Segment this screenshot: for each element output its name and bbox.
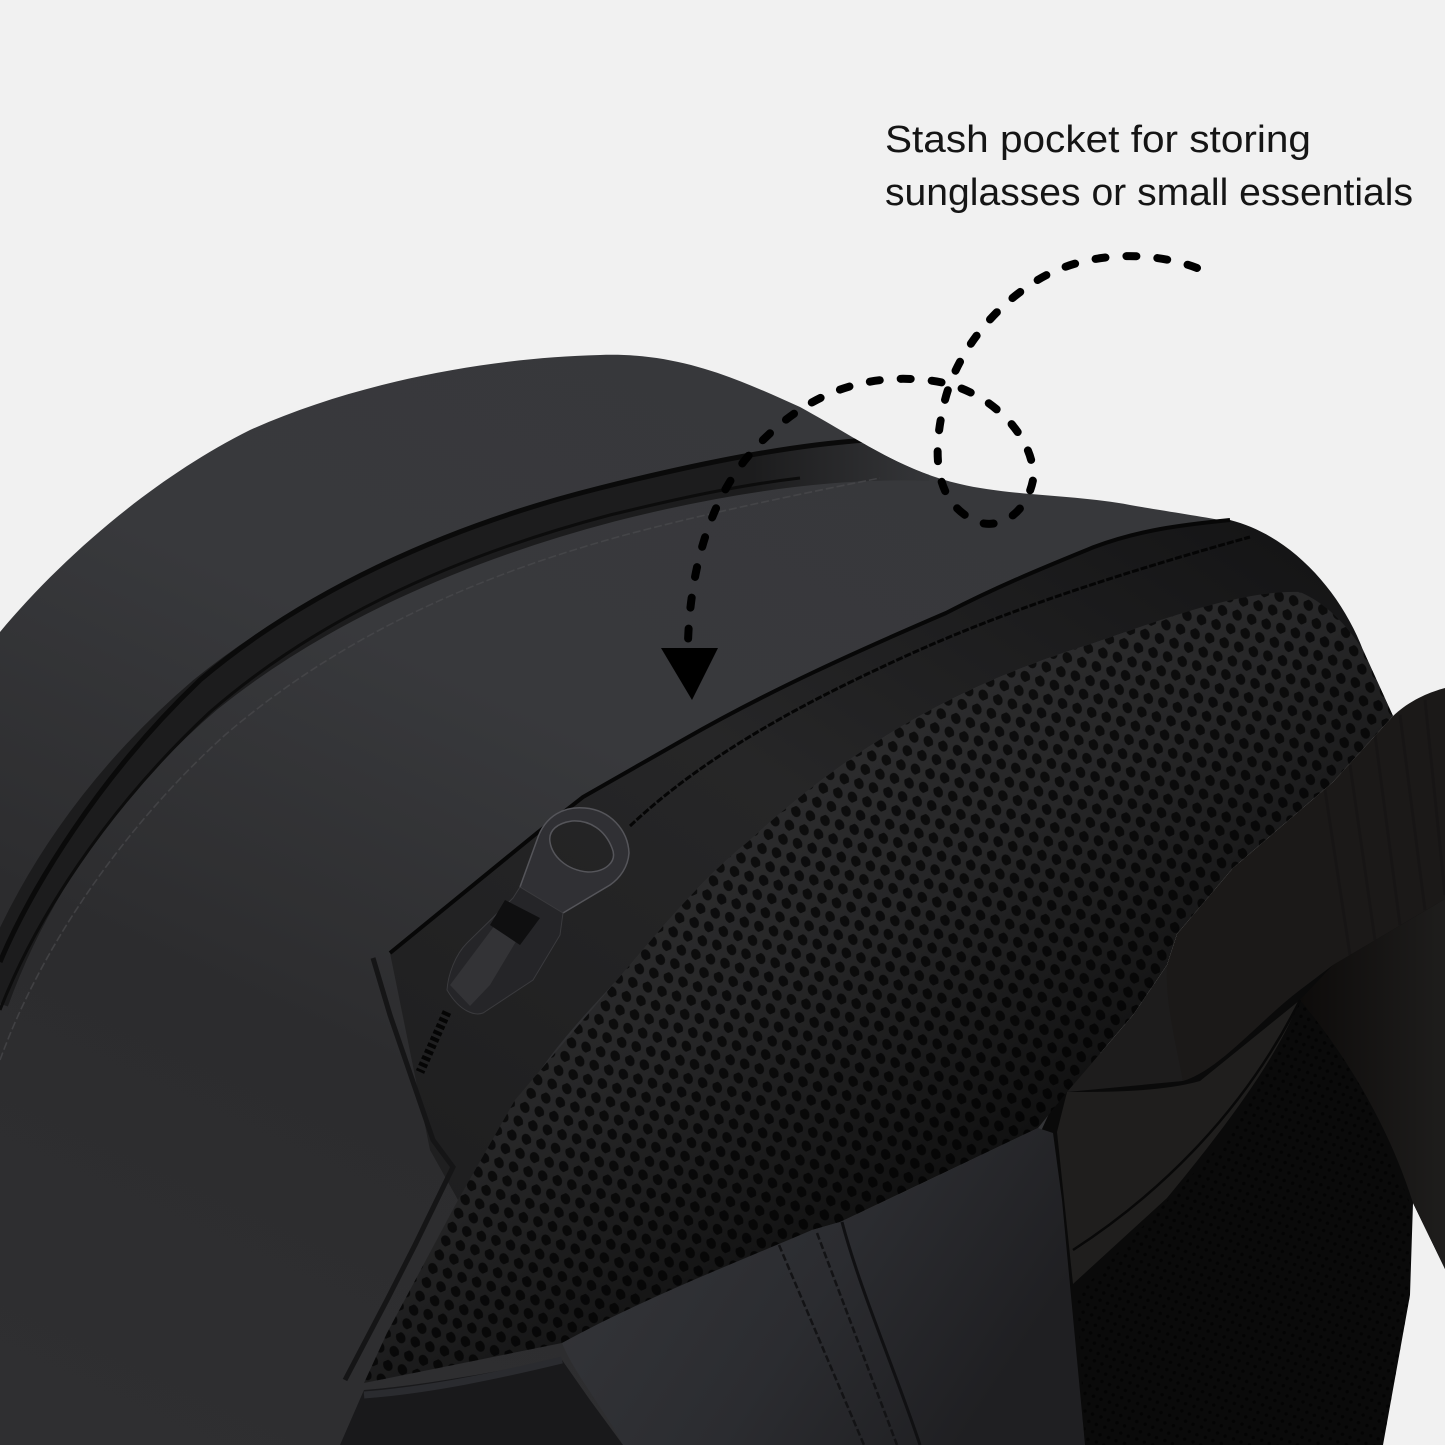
flap edge xyxy=(345,958,453,1380)
bag main leather body xyxy=(0,355,1290,1445)
upper zipper seam xyxy=(0,440,930,1060)
front carry handle xyxy=(562,1128,1085,1445)
zipper teeth xyxy=(420,1012,447,1072)
lower back mesh and shoulder strap base xyxy=(800,880,1445,1445)
slider window xyxy=(490,900,540,945)
zipper pull tab xyxy=(520,808,629,913)
mesh holes xyxy=(364,592,1393,1383)
arrow: dashed looping pointer to pocket xyxy=(661,256,1197,700)
arrow head xyxy=(661,648,718,700)
binding edge line xyxy=(1073,1000,1300,1250)
glossy side binding xyxy=(1057,1000,1300,1284)
zipper binding band xyxy=(390,520,1393,1200)
annotation text: sunglasses or small essentials xyxy=(885,172,1413,214)
right shoulder strap body xyxy=(1300,899,1445,1269)
woven strap webbing base xyxy=(1067,965,1183,1092)
lower piping xyxy=(364,1360,562,1395)
lower mesh texture xyxy=(1077,1000,1410,1445)
slider bridge xyxy=(450,905,530,1006)
handle stitching xyxy=(779,1222,920,1445)
breathable mesh back panel xyxy=(364,592,1393,1383)
zipper slider xyxy=(447,887,563,1014)
strap ribbing xyxy=(1325,700,1445,955)
arrow dashed line xyxy=(688,256,1197,642)
backpack photo xyxy=(0,355,1445,1445)
lower leather panel xyxy=(340,1360,623,1445)
annotation text: Stash pocket for storing xyxy=(885,119,1311,161)
upper shoulder strap webbing xyxy=(1167,688,1445,1081)
binding edge and stitch line xyxy=(390,520,1250,953)
icon: zipper pull xyxy=(447,808,629,1014)
